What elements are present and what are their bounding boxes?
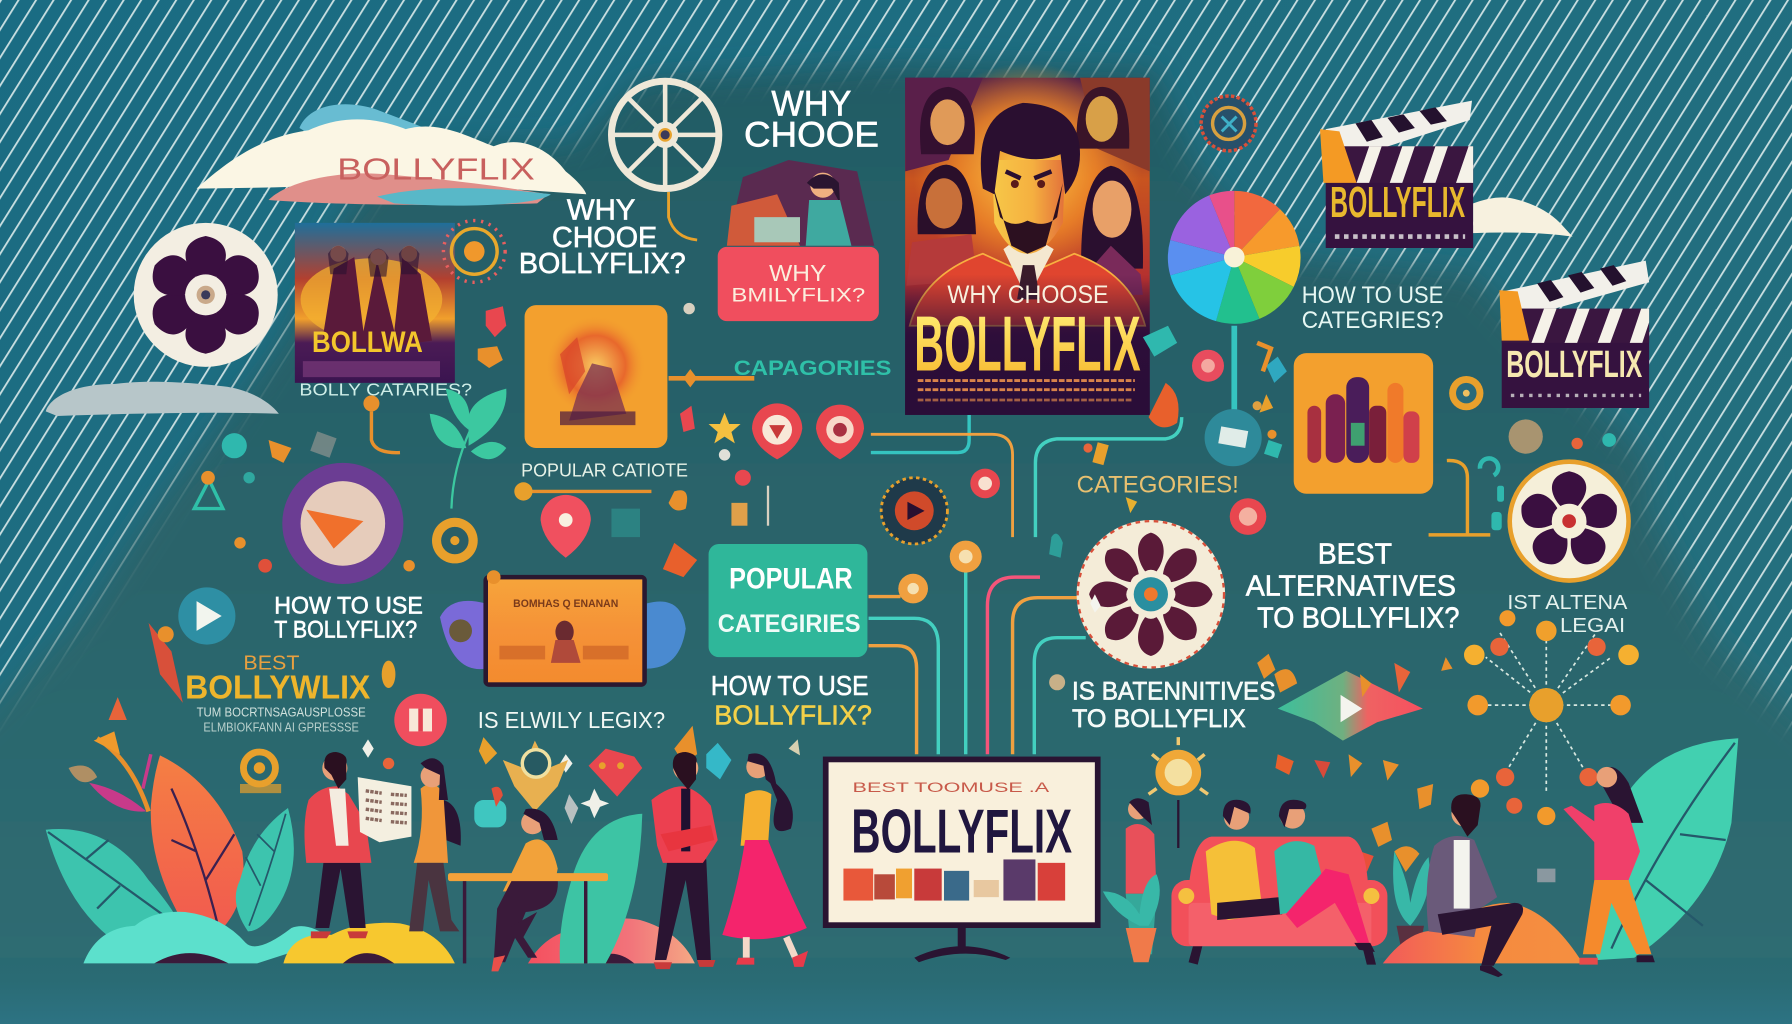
woman face mid right: [1080, 166, 1143, 295]
heading: how to use categories: [1302, 282, 1443, 334]
talking woman: [1563, 767, 1655, 965]
heading: why choose bollyflix: CHOOE: [552, 222, 657, 254]
table: [448, 873, 608, 963]
icon: gold coin: [432, 518, 478, 563]
color wheel: [1168, 191, 1301, 324]
pink box: why bollyflix: [718, 247, 879, 321]
caption: Bolly catagories: BOLLY CATARIES?: [299, 379, 472, 399]
green box: popular categories: CATEGIRIES: [718, 610, 861, 638]
tv screen left: BOMHAS Q ENANAN: [513, 598, 618, 610]
caption: is bollyflix legal: IS ELWILY LEGIX?: [478, 707, 665, 733]
icon: target coin right: [1449, 376, 1483, 410]
heading: why choose: WHY: [771, 83, 851, 123]
leaf teal left: [46, 829, 181, 949]
caption: popular categories: POPULAR CATIOTE: [521, 460, 688, 481]
leaf teal right: [236, 808, 294, 931]
caption: is alternatives legal: LEGAI: [1560, 614, 1625, 637]
heading: best alternatives: BEST: [1318, 538, 1392, 570]
main TV: Bollyflix: BEST TOOMUSE .A: [853, 780, 1050, 795]
heading: how to use categories: HOW TO USE: [1302, 282, 1443, 309]
icon: round medallion: [1201, 96, 1256, 151]
heading: how to use bollyflix left: T BOLLYFLIX?: [274, 617, 417, 644]
clapperboard 2: [1499, 261, 1649, 408]
woman face mid left: [906, 165, 977, 286]
plant with pot: [1103, 874, 1160, 962]
caption: is alternatives to bollyflix: [1072, 677, 1275, 733]
teal person: [1274, 800, 1375, 952]
icons: red pins and star: [709, 403, 864, 459]
orange mound: [1383, 903, 1583, 963]
seated woman at table: [491, 809, 558, 971]
leaf teal behind table: [560, 814, 642, 963]
main poster: why choose bollyflix: BOLLYFLIX: [914, 301, 1141, 387]
heading: best alternatives: [1246, 538, 1459, 634]
cloud with Bollyflix title: BOLLYFLIX: [337, 151, 535, 186]
caption: is alternatives legal: [1507, 591, 1628, 637]
orange box: people: [1294, 353, 1433, 494]
leaf red: [151, 755, 244, 931]
heading: best alternatives: ALTERNATIVES: [1246, 570, 1456, 602]
small plant right: [1393, 851, 1430, 949]
pink box: why bollyflix: WHY: [769, 260, 826, 286]
main poster: why choose bollyflix: WHY CHOOSE: [947, 281, 1109, 309]
standing woman by plant: [1126, 798, 1157, 954]
man jacket: [910, 254, 1145, 326]
purple circle play badge: [282, 463, 403, 584]
connector: orange hook: [363, 395, 651, 501]
small Bollywood poster: [295, 223, 455, 383]
woman face top left: [920, 87, 975, 154]
main TV: Bollyflix: BOLLYFLIX: [851, 798, 1072, 867]
man arms crossed: [651, 752, 718, 969]
text block: best bollywlix: BEST: [243, 652, 300, 675]
tv screen left: [440, 575, 686, 687]
heading: how to use bollyflix centre: HOW TO USE: [711, 670, 869, 701]
heading: why choose bollyflix: BOLLYFLIX?: [519, 248, 686, 280]
green box: popular categories: POPULAR: [729, 563, 853, 596]
heading: why choose: CHOOE: [744, 114, 879, 154]
caption: categories teal: CAPAGORIES: [734, 355, 891, 380]
newspaper: [358, 777, 411, 842]
icon: red ring: [1192, 350, 1224, 382]
caption: is alternatives to bollyflix: IS BATENNITIVES: [1072, 677, 1275, 705]
text block: best bollywlix: ELMBIOKFANN AI GPRESSSE: [203, 720, 359, 734]
small painting: woman with laptop: [727, 160, 874, 246]
orange box: popular categories art: [525, 305, 667, 448]
seated bearded man: [1427, 794, 1523, 977]
caption: categories teal: [669, 355, 891, 387]
main TV: Bollyflix: [823, 757, 1101, 962]
film reel, left: [134, 223, 278, 367]
plant group left: leaves: [46, 731, 294, 949]
icon: red pin: [541, 495, 591, 558]
yellow person: [1206, 800, 1282, 920]
caption: is alternatives to bollyflix: TO BOLLYFLIX: [1072, 705, 1246, 733]
cloud with Bollyflix title: [197, 104, 586, 206]
icon: sun badge: [443, 221, 505, 282]
woman in pink dress: [722, 753, 808, 967]
sofa: [1171, 837, 1387, 965]
text block: best bollywlix: TUM BOCRTNSAGAUSPLOSSE: [197, 706, 366, 720]
man head: [992, 160, 1065, 254]
icon: red badge: [970, 469, 1000, 498]
heading: how to use bollyflix centre: [711, 670, 872, 731]
scattered small icons: [109, 303, 1616, 882]
film reel, right: [1510, 462, 1629, 581]
star ring icon: [503, 741, 568, 811]
caption: categories gold: CATEGORIES!: [1077, 472, 1239, 499]
man with newspaper: [304, 752, 371, 938]
icon: dark lens medallion: [881, 478, 947, 544]
network star: [1464, 610, 1639, 825]
text block: best bollywlix: [185, 652, 370, 734]
woman face top right: [1076, 87, 1129, 149]
heading: why choose bollyflix: WHY: [567, 194, 635, 226]
people on sofa: [1206, 800, 1375, 952]
play diamond: [1278, 671, 1423, 741]
pink box: why bollyflix: BMILYFLIX?: [731, 285, 865, 307]
connector lines: [869, 415, 1182, 754]
icon: play circle: [178, 587, 235, 645]
lamp icon: [1149, 737, 1208, 848]
heading: how to use categories: CATEGRIES?: [1302, 307, 1443, 334]
small Bollywood poster: BOLLWA: [312, 326, 423, 359]
woman with newspaper: [409, 758, 461, 931]
icon: blue ball with stem: [1205, 326, 1262, 466]
clapperboard 2: BOLLYFLIX: [1506, 343, 1642, 385]
red gem icon: [589, 749, 642, 797]
heading: best alternatives: TO BOLLYFLIX?: [1257, 602, 1459, 634]
main poster: why choose bollyflix: [905, 63, 1150, 415]
clapperboard 1: [1320, 101, 1473, 248]
mounds: [83, 912, 695, 963]
caption: is alternatives legal: IST ALTENA: [1507, 591, 1628, 614]
clapperboard 1: BOLLYFLIX: [1330, 179, 1465, 227]
green box: popular categories: [709, 544, 867, 657]
heading: how to use bollyflix left: [274, 593, 423, 644]
text block: best bollywlix: BOLLYWLIX: [185, 669, 370, 706]
film reel, centre: [1077, 520, 1225, 669]
heading: why choose: [744, 83, 879, 154]
wheel top: [611, 81, 719, 240]
cloud small right: [1473, 197, 1573, 237]
grey cloud: [46, 382, 279, 416]
heading: why choose bollyflix: [519, 194, 686, 280]
big teal leaf right: [1594, 738, 1738, 960]
leaf sprout: [430, 389, 506, 509]
heading: how to use bollyflix left: HOW TO USE: [274, 593, 423, 620]
icon: red circle badge: [394, 694, 447, 746]
teal gem icon: [706, 743, 731, 779]
heading: how to use bollyflix centre: BOLLYFLIX?: [714, 700, 872, 731]
